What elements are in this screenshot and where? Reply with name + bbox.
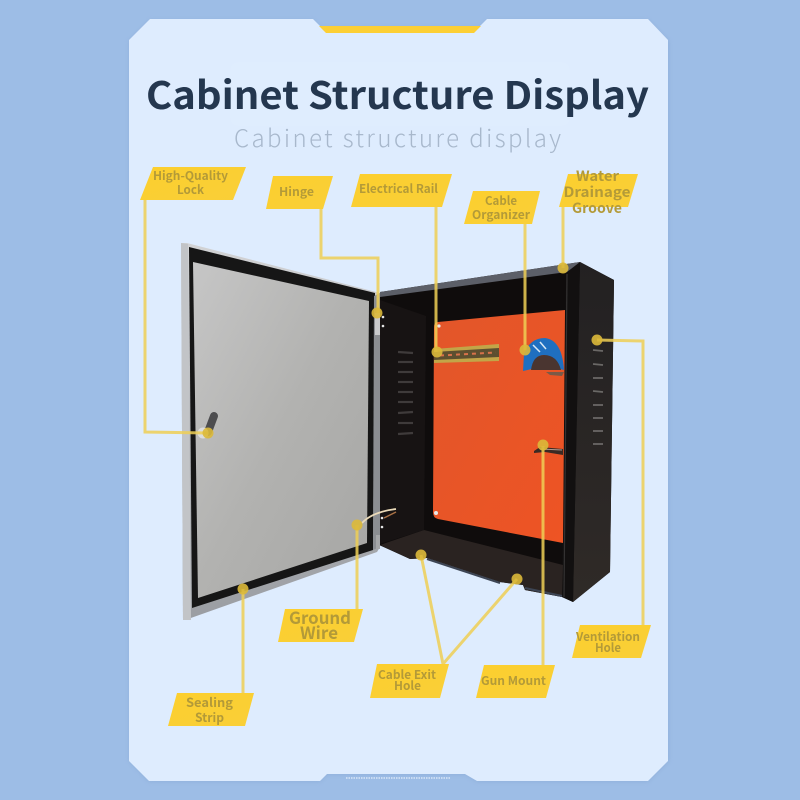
ventilation slots, right side bbox=[593, 350, 603, 444]
label: Cable Exit Hole bbox=[370, 664, 449, 698]
title backdrop bbox=[230, 62, 570, 126]
leader: hinge bbox=[321, 209, 378, 313]
electrical rail bbox=[434, 344, 499, 363]
leader: ventilation hole bbox=[597, 340, 643, 625]
ground wire bbox=[362, 509, 396, 523]
label: High-Quality Lock bbox=[140, 167, 246, 200]
door-side screws bbox=[381, 316, 384, 528]
leader: gun mount bbox=[542, 446, 544, 665]
plate screws bbox=[434, 324, 441, 515]
cable organizer bbox=[523, 338, 564, 376]
label: Sealing Strip: Sealing bbox=[186, 692, 234, 711]
label: Ventilation Hole: Hole bbox=[595, 639, 621, 656]
label: Water Drainage Groove: Water bbox=[576, 166, 620, 186]
title: Cabinet Structure Display bbox=[146, 65, 649, 120]
label: Sealing Strip bbox=[168, 692, 254, 726]
leader lines bbox=[145, 200, 643, 693]
label: Cable Organizer bbox=[464, 191, 540, 224]
label: Water Drainage Groove: Drainage bbox=[564, 182, 630, 202]
label: Water Drainage Groove: Groove bbox=[572, 198, 622, 218]
cabinet photo illustration bbox=[181, 243, 614, 620]
label: Electrical Rail bbox=[351, 174, 452, 207]
label: Ground Wire bbox=[278, 604, 363, 644]
label: Gun Mount bbox=[476, 665, 555, 698]
subtitle: Cabinet structure display bbox=[234, 119, 561, 154]
leader: sealing strip bbox=[242, 589, 244, 693]
label: Ventilation Hole bbox=[572, 625, 651, 658]
lock handle bbox=[198, 416, 214, 438]
label: Cable Organizer: Organizer bbox=[472, 206, 531, 223]
label: Ground Wire: Wire bbox=[300, 619, 338, 644]
label: Hinge: Hinge bbox=[279, 183, 314, 200]
top accent bar bbox=[319, 26, 481, 33]
label: Cable Exit Hole: Hole bbox=[394, 677, 421, 694]
leader: ground wire bbox=[356, 525, 358, 609]
label: Ground Wire: Ground bbox=[289, 604, 351, 629]
label: Sealing Strip: Strip bbox=[195, 707, 224, 726]
leader: lock bbox=[145, 200, 208, 433]
orange mounting plate bbox=[433, 310, 565, 543]
label: High-Quality Lock: Lock bbox=[177, 181, 205, 198]
label: Electrical Rail: Electrical Rail bbox=[359, 180, 438, 197]
gun mount bracket bbox=[534, 447, 563, 455]
bottom dotted accent bbox=[346, 777, 450, 779]
label: High-Quality Lock: High-Quality bbox=[153, 167, 228, 184]
panel bbox=[129, 19, 669, 782]
label: Ventilation Hole: Ventilation bbox=[575, 628, 640, 645]
door bbox=[181, 243, 380, 620]
cabinet body bbox=[379, 262, 614, 602]
label: Cable Organizer: Cable bbox=[485, 192, 517, 209]
label: Water Drainage Groove bbox=[559, 166, 638, 218]
label: Cable Exit Hole: Cable Exit bbox=[378, 666, 436, 683]
label: Hinge bbox=[266, 176, 333, 209]
leader: electrical rail bbox=[434, 207, 438, 352]
ventilation slots, side wall bbox=[398, 352, 413, 434]
leader: water drainage groove bbox=[562, 207, 564, 268]
callout dots bbox=[202, 262, 602, 594]
leader: cable organizer bbox=[524, 224, 526, 350]
label: Gun Mount: Gun Mount bbox=[481, 672, 546, 689]
leader: cable exit hole bbox=[421, 555, 517, 664]
